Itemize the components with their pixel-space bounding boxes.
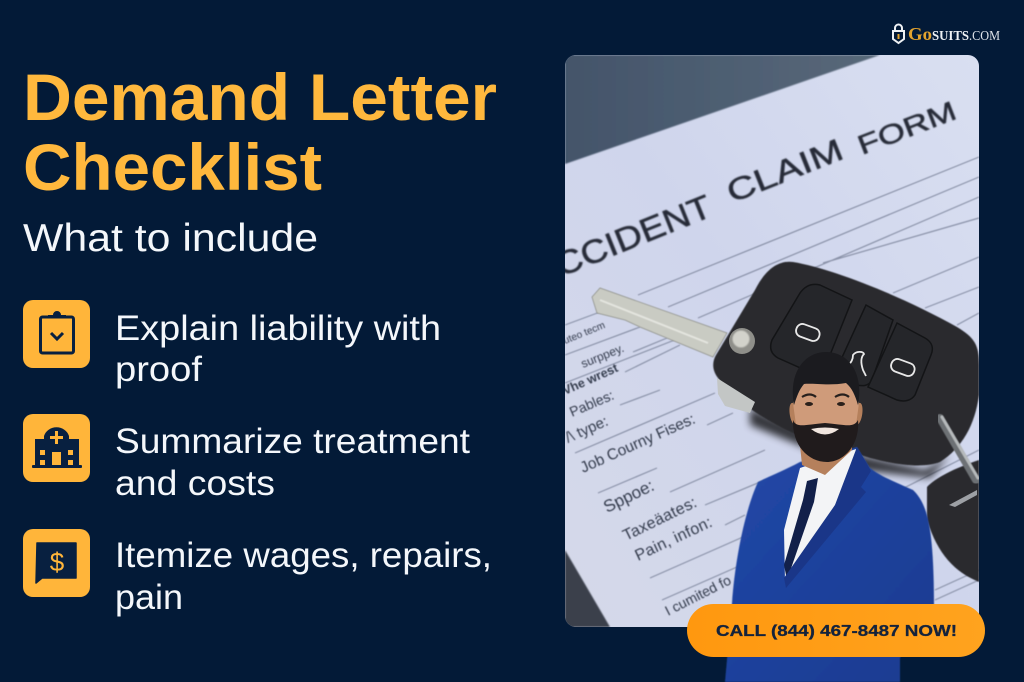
logo wordmark: SUITS — [932, 29, 969, 44]
icon: dollar speech bubble: $ — [50, 547, 65, 577]
logo: GoSuits.com — [893, 24, 1000, 44]
fob knob — [729, 328, 755, 354]
checklist item: damages — [23, 529, 492, 617]
item text: Summarize treatment — [115, 422, 470, 461]
lapel — [784, 447, 871, 588]
item text: and costs — [115, 464, 275, 503]
title: Checklist — [23, 130, 322, 204]
photo: table bottom corner — [565, 550, 610, 627]
form field labels: I cumited fo — [662, 572, 734, 619]
item text — [115, 309, 441, 389]
form field labels: Vhe wrest — [561, 361, 621, 398]
face — [793, 364, 859, 452]
icon: clipboard check — [23, 300, 90, 368]
item text: Explain liability with — [115, 309, 441, 348]
panel: accident claim photo — [550, 55, 979, 627]
icon: dollar speech bubble — [23, 529, 90, 597]
metal base of fob — [717, 378, 755, 413]
item text: proof — [115, 350, 202, 389]
logo wordmark: .COM — [969, 28, 1000, 43]
neck — [800, 445, 852, 475]
form field labels: surppey. — [579, 341, 626, 371]
title: Demand Letter — [23, 60, 497, 134]
item text: Itemize wages, repairs, — [115, 536, 492, 575]
call to action button: CALL (844) 467-8487 NOW! — [716, 623, 957, 640]
form field labels: Pables: — [567, 387, 616, 420]
photo: dark table top — [565, 55, 880, 164]
form heading: CLAIM — [722, 132, 848, 210]
item text — [115, 536, 492, 617]
form heading: CCIDENT — [550, 187, 717, 283]
suit — [725, 447, 934, 682]
checklist item: treatment — [23, 414, 470, 503]
fob button glyphs — [794, 322, 916, 378]
form field labels: Taxeäates: — [620, 494, 700, 545]
subtitle: What to include — [23, 217, 318, 260]
form field labels: /\ type: — [563, 413, 611, 447]
hair — [793, 352, 859, 405]
tie — [784, 478, 818, 580]
shirt — [784, 449, 856, 582]
key blade — [592, 288, 727, 357]
form ruled lines — [565, 157, 979, 600]
photo: paper form — [565, 55, 979, 627]
icon: padlock — [893, 24, 904, 43]
second fob highlight — [949, 490, 977, 507]
call to action button — [687, 604, 985, 657]
form field labels — [561, 320, 734, 619]
form heading: FORM — [853, 96, 960, 161]
item text: pain — [115, 578, 183, 617]
form field labels: Job Courny Fises: — [578, 411, 698, 477]
person: attorney in blue suit — [725, 352, 934, 682]
key ring — [940, 417, 978, 480]
checklist item: liability — [23, 300, 441, 389]
item text — [115, 422, 470, 503]
second fob — [927, 460, 979, 582]
logo wordmark: Go — [908, 24, 932, 44]
icon: hospital — [23, 414, 90, 482]
form field labels: uteo tecm — [562, 320, 607, 347]
beard and smile — [793, 420, 858, 462]
form heading — [565, 100, 957, 274]
logo wordmark — [908, 24, 1000, 44]
key fob — [713, 262, 979, 465]
form field labels: Pain, infon: — [633, 514, 715, 565]
ears — [789, 403, 863, 425]
eyes and brows — [802, 394, 849, 406]
form field labels: Sppoe: — [600, 476, 657, 517]
title — [23, 60, 497, 204]
fob shadow — [750, 408, 950, 478]
fob buttons — [771, 284, 932, 401]
